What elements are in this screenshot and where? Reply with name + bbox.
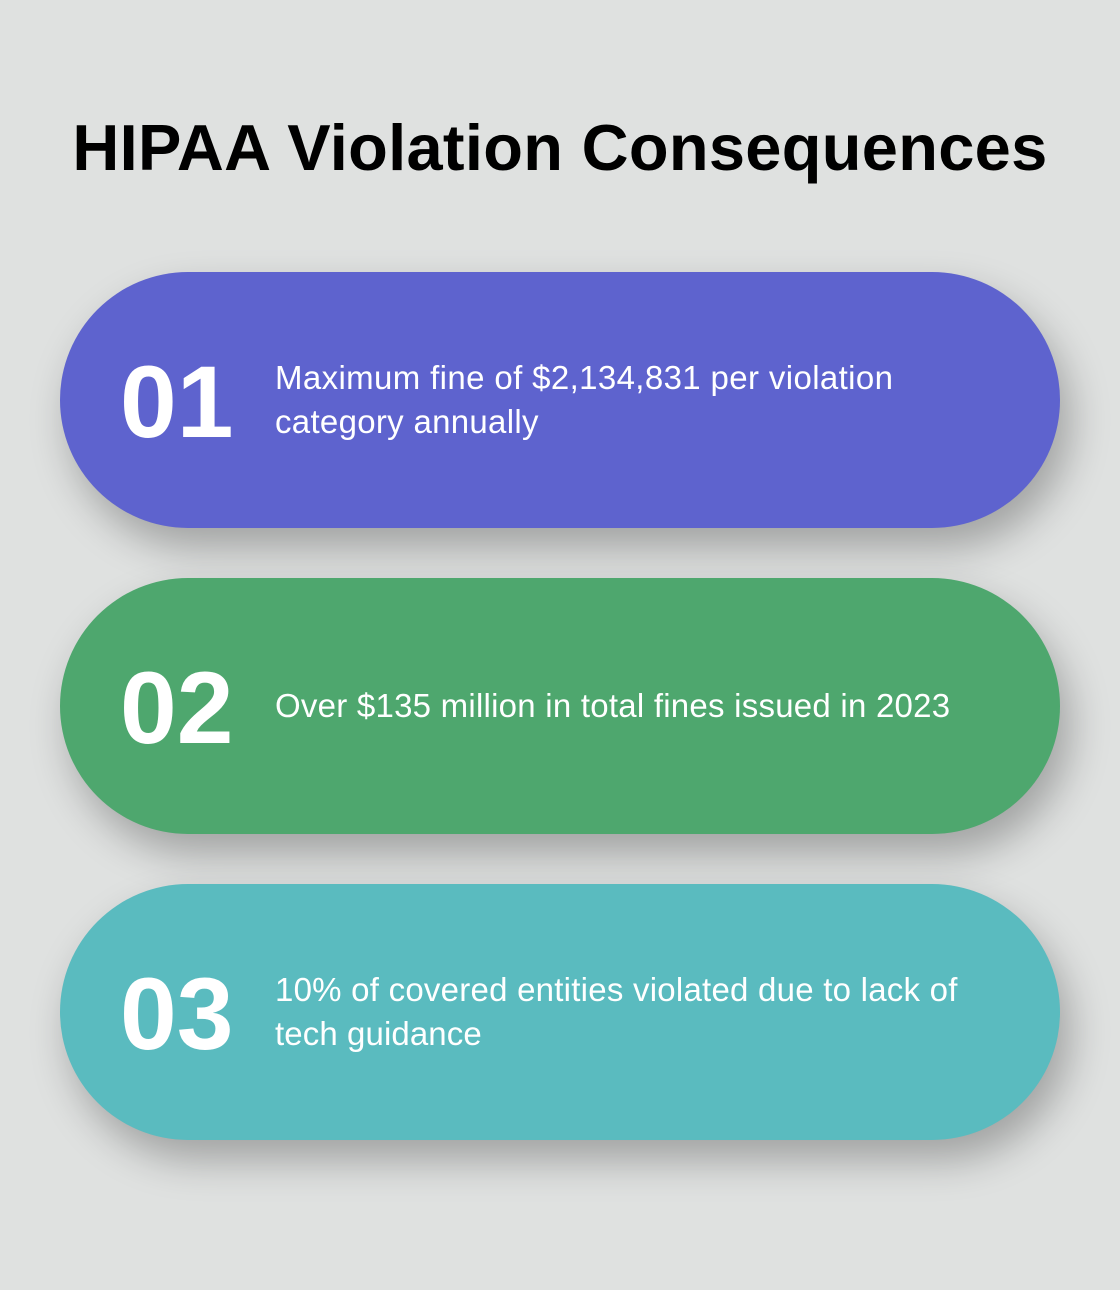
number 03: 03 — [120, 957, 233, 1071]
text: card 03: tech guidance — [275, 1015, 482, 1052]
title: HIPAA Violation Consequences — [72, 111, 1048, 184]
text: card 01: category annually — [275, 403, 539, 440]
number 01: 01 — [120, 345, 233, 459]
panel: card 01 — [60, 272, 1060, 528]
text: card 01: Maximum fine of $2,134,831 per violation — [275, 359, 893, 396]
text: card 01 — [275, 359, 893, 440]
text: card 02: Over $135 million in total fines issued in 2023 — [275, 687, 950, 724]
text: card 03: 10% of covered entities violated due to lack of — [275, 971, 958, 1008]
panel: card 03 — [60, 884, 1060, 1140]
number 02: 02 — [120, 651, 233, 765]
text: card 03 — [275, 971, 958, 1052]
panel: card 02 — [60, 578, 1060, 834]
